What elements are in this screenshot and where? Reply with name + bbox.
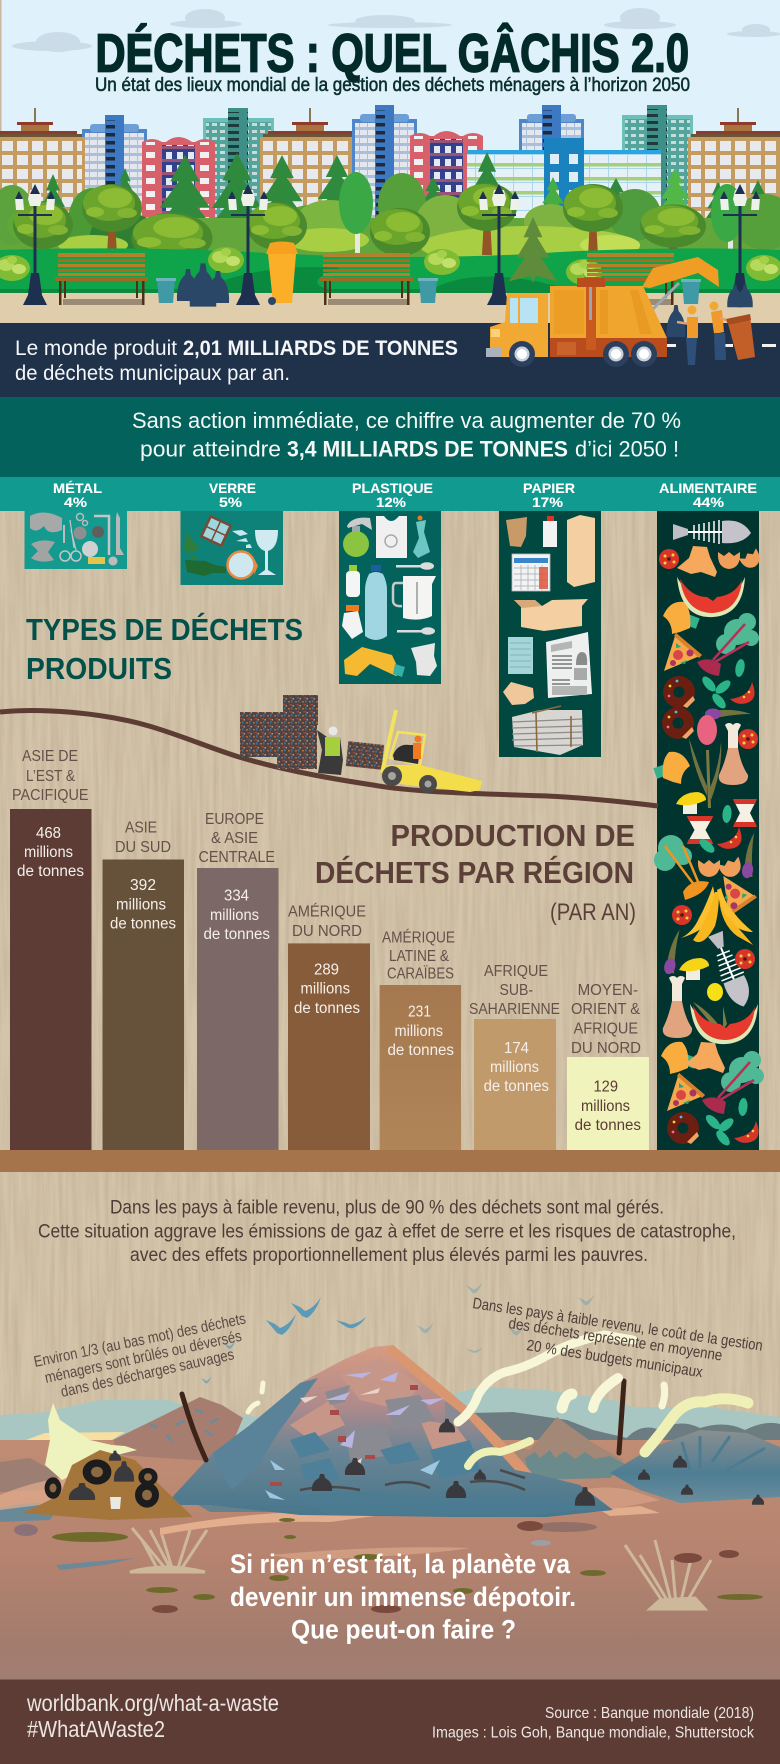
- bar: East Asia and Pacific: de tonnes: [17, 863, 84, 880]
- lamps: [15, 184, 760, 305]
- bar: Sub-Saharan Africa: 174: [504, 1040, 529, 1057]
- benches: [55, 253, 677, 305]
- road markings: [667, 344, 776, 347]
- slope curve: [0, 711, 658, 806]
- bucket: [110, 1497, 121, 1509]
- back mound left: [113, 1397, 243, 1462]
- footer credits: [432, 1705, 755, 1741]
- birch trees: [339, 172, 743, 264]
- bar: Europe and Central Asia: EUROPE: [205, 811, 264, 828]
- text: mismanaged waste: avec des effets proportionnellement plus élevés parmi les pauvres.: [130, 1245, 648, 1266]
- bar: Middle East and North Africa: [567, 982, 649, 1150]
- tires: [83, 1459, 111, 1485]
- rounded trees: [13, 172, 743, 288]
- grass on right mound: [525, 1450, 625, 1480]
- header band: waste types: PLASTIQUE: [352, 480, 433, 496]
- sky and city header: [0, 0, 780, 325]
- road text: [15, 337, 458, 385]
- pile left flank: [213, 1378, 318, 1490]
- bar: East Asia and Pacific: PACIFIQUE: [12, 787, 88, 804]
- panel: projection: pour atteindre: [140, 436, 281, 462]
- bar: Europe and Central Asia: millions: [210, 907, 259, 924]
- ground rocks: [14, 1521, 739, 1613]
- bar: Middle East and North Africa: millions: [581, 1098, 630, 1115]
- yellow bin: [266, 242, 298, 305]
- footer: [0, 1680, 780, 1764]
- bar: Sub-Saharan Africa: SUB-: [500, 982, 533, 999]
- small right mound: [505, 1417, 623, 1477]
- bar: Sub-Saharan Africa: de tonnes: [484, 1078, 549, 1095]
- bar: Latin America and Caribbean: AMÉRIQUE: [382, 930, 455, 946]
- note: open dumps: Environ 1/3 (au bas mot) des déchets: [32, 1310, 248, 1371]
- header band: waste types: ALIMENTAIRE: [659, 480, 757, 496]
- bar: Middle East and North Africa: ORIENT &: [571, 1001, 641, 1018]
- bar: North America: de tonnes: [294, 1000, 360, 1017]
- call to action: Si rien n’est fait, la planète va: [230, 1549, 571, 1579]
- text: mismanaged waste: [38, 1198, 736, 1266]
- clouds: [12, 8, 780, 52]
- ground shadows left: [0, 1458, 300, 1522]
- bar: South Asia: ASIE: [125, 820, 157, 837]
- panel: paper: [499, 510, 601, 757]
- bar: Middle East and North Africa: AFRIQUE: [574, 1021, 638, 1038]
- bar: Europe and Central Asia: CENTRALE: [198, 849, 275, 866]
- heading: production by region: DÉCHETS PAR RÉGION: [315, 855, 634, 890]
- silhouette branches: [682, 1436, 765, 1470]
- buildings: [0, 105, 780, 248]
- header band: waste types: 12%: [376, 494, 407, 510]
- bar: Middle East and North Africa: de tonnes: [575, 1117, 641, 1134]
- bar: North America: millions: [300, 980, 350, 997]
- bar: Sub-Saharan Africa: millions: [490, 1059, 539, 1076]
- pile shadow base: [290, 1492, 600, 1517]
- footer links: #WhatAWaste2: [27, 1716, 165, 1742]
- note: open dumps: [32, 1310, 248, 1401]
- bar: South Asia: [102, 820, 184, 1150]
- bar: Europe and Central Asia: de tonnes: [204, 926, 270, 943]
- bar: Europe and Central Asia: & ASIE: [211, 830, 258, 847]
- subtitle: Un état des lieux mondial de la gestion des déchets ménagers à l’horizon 2050: [95, 74, 690, 96]
- mound flecks: [150, 1408, 219, 1442]
- small bale: [346, 741, 384, 770]
- trash cans: [156, 278, 701, 304]
- pile black bags: [312, 1419, 764, 1506]
- heading: types of waste: PRODUITS: [26, 651, 172, 686]
- bar: East Asia and Pacific: [10, 748, 92, 1150]
- bar: Sub-Saharan Africa: AFRIQUE: [484, 963, 548, 980]
- bar: North America: AMÉRIQUE: [288, 904, 366, 921]
- pile mottling: [290, 1358, 470, 1460]
- note: open dumps: dans des décharges sauvages: [59, 1346, 236, 1401]
- bar: East Asia and Pacific: millions: [24, 844, 73, 861]
- footer links: [26, 1690, 279, 1742]
- background wood: [0, 505, 780, 1445]
- panel: metal: [24, 510, 127, 569]
- bales: [240, 695, 318, 769]
- call to action: devenir un immense dépotoir.: [230, 1582, 576, 1612]
- road text: de déchets municipaux par an.: [15, 362, 290, 385]
- garbage truck: [486, 257, 719, 367]
- landfill landscape: [0, 1282, 780, 1680]
- grass tufts: [130, 1528, 711, 1609]
- road band: [0, 323, 780, 397]
- header band: waste types: 17%: [532, 494, 564, 510]
- salmon highlights: [0, 1476, 660, 1560]
- pavement: [0, 293, 780, 323]
- footer credits: Source : Banque mondiale (2018): [545, 1705, 754, 1722]
- worker: [317, 726, 343, 775]
- bar: North America: DU NORD: [292, 923, 362, 940]
- footer links: worldbank.org/what-a-waste: [26, 1690, 279, 1716]
- workers: [667, 302, 755, 365]
- bar: Sub-Saharan Africa: SAHARIENNE: [469, 1001, 560, 1018]
- bar: Middle East and North Africa: MOYEN-: [578, 982, 638, 999]
- bar: Europe and Central Asia: 334: [224, 888, 249, 904]
- bar: East Asia and Pacific: L’EST &: [26, 768, 76, 785]
- text: mismanaged waste: Dans les pays à faible revenu, plus de 90 % des déchets sont mal gérés.: [110, 1198, 664, 1219]
- header band: waste types: PAPIER: [523, 480, 575, 496]
- conifers: [35, 152, 776, 243]
- bar: Europe and Central Asia: [197, 811, 278, 1150]
- bar: South Asia: millions: [116, 896, 166, 914]
- bar: South Asia: de tonnes: [110, 916, 176, 933]
- panel: food: [653, 510, 764, 1150]
- bar: South Asia: DU SUD: [115, 839, 171, 856]
- main pile: [165, 1345, 613, 1517]
- bar: Latin America and Caribbean: millions: [394, 1023, 443, 1040]
- header band: waste types: 44%: [693, 494, 725, 510]
- heap mound: [23, 1450, 193, 1520]
- pile orange edge: [385, 1345, 532, 1473]
- bar: East Asia and Pacific: 468: [36, 825, 61, 842]
- header band: waste types: [0, 477, 780, 511]
- header band: waste types: 4%: [64, 494, 88, 510]
- smoke plumes: [248, 1335, 748, 1466]
- bar chart: waste by region: [10, 748, 649, 1150]
- panel: projection: d’ici 2050 !: [575, 436, 679, 462]
- text: mismanaged waste: Cette situation aggrave les émissions de gaz à effet de serre et les risques de catastrophe,: [38, 1221, 736, 1242]
- trash fire: [45, 1403, 137, 1480]
- bar: North America: 289: [314, 962, 339, 979]
- heading: types of waste: TYPES DE DÉCHETS: [26, 612, 303, 647]
- panel: projection: [0, 397, 780, 477]
- forklift: [382, 710, 482, 793]
- panel: plastic: [339, 510, 441, 684]
- sticks: [182, 1381, 624, 1460]
- bar: North America: [288, 904, 370, 1150]
- garbage bags: [177, 263, 753, 307]
- panel: glass: [180, 510, 283, 585]
- heading: types of waste: [26, 612, 303, 686]
- call to action: [230, 1549, 576, 1644]
- lawn shadows: [0, 267, 780, 293]
- panel: projection: 3,4 MILLIARDS DE TONNES: [287, 436, 568, 462]
- bar: Latin America and Caribbean: LATINE &: [389, 948, 450, 965]
- lawn: [0, 248, 780, 294]
- sunlit sliver: [26, 1432, 125, 1441]
- header band: waste types: 5%: [219, 494, 243, 510]
- call to action: Que peut-on faire ?: [291, 1614, 516, 1644]
- note: open dumps: ménagers sont brûlés ou déversés: [43, 1328, 244, 1387]
- header band: waste types: MÉTAL: [53, 480, 102, 496]
- panel: projection: Sans action immédiate, ce chiffre va augmenter de 70 %: [132, 408, 681, 433]
- small trash heap: [23, 1403, 193, 1520]
- distant hills: [0, 1387, 780, 1450]
- bar: Latin America and Caribbean: CARAÏBES: [387, 966, 454, 983]
- note: municipal budgets: des déchets représente en moyenne: [507, 1315, 723, 1365]
- note: municipal budgets: 20 % des budgets municipaux: [525, 1337, 704, 1381]
- bar: Middle East and North Africa: DU NORD: [571, 1040, 641, 1057]
- back greenery: [0, 173, 780, 266]
- bushes: [0, 247, 780, 285]
- road text: 2,01 MILLIARDS DE TONNES: [183, 337, 458, 360]
- ground patches: [52, 1518, 763, 1600]
- heading: production by region: PRODUCTION DE: [390, 818, 635, 853]
- pile debris: [265, 1372, 525, 1500]
- road text: Le monde produit: [15, 337, 177, 360]
- bar: Middle East and North Africa: 129: [594, 1079, 618, 1096]
- bar: Sub-Saharan Africa: [469, 963, 560, 1150]
- bar: Latin America and Caribbean: de tonnes: [388, 1042, 454, 1059]
- heap bags: [69, 1483, 95, 1500]
- darker hills: [470, 1412, 780, 1441]
- header band: waste types: VERRE: [209, 480, 256, 496]
- bar: South Asia: 392: [130, 877, 156, 894]
- bar: Latin America and Caribbean: [380, 930, 461, 1150]
- heading: production by region: (PAR AN): [550, 899, 636, 926]
- forklift scene: [240, 695, 482, 793]
- bar: Latin America and Caribbean: 231: [408, 1004, 431, 1021]
- ground bar: [0, 1150, 780, 1172]
- bar: East Asia and Pacific: ASIE DE: [22, 748, 78, 765]
- heading: production by region: [315, 818, 636, 926]
- birds: [201, 1282, 594, 1384]
- right pile: [610, 1430, 780, 1503]
- spruce: [509, 217, 557, 283]
- ground: [0, 1440, 780, 1680]
